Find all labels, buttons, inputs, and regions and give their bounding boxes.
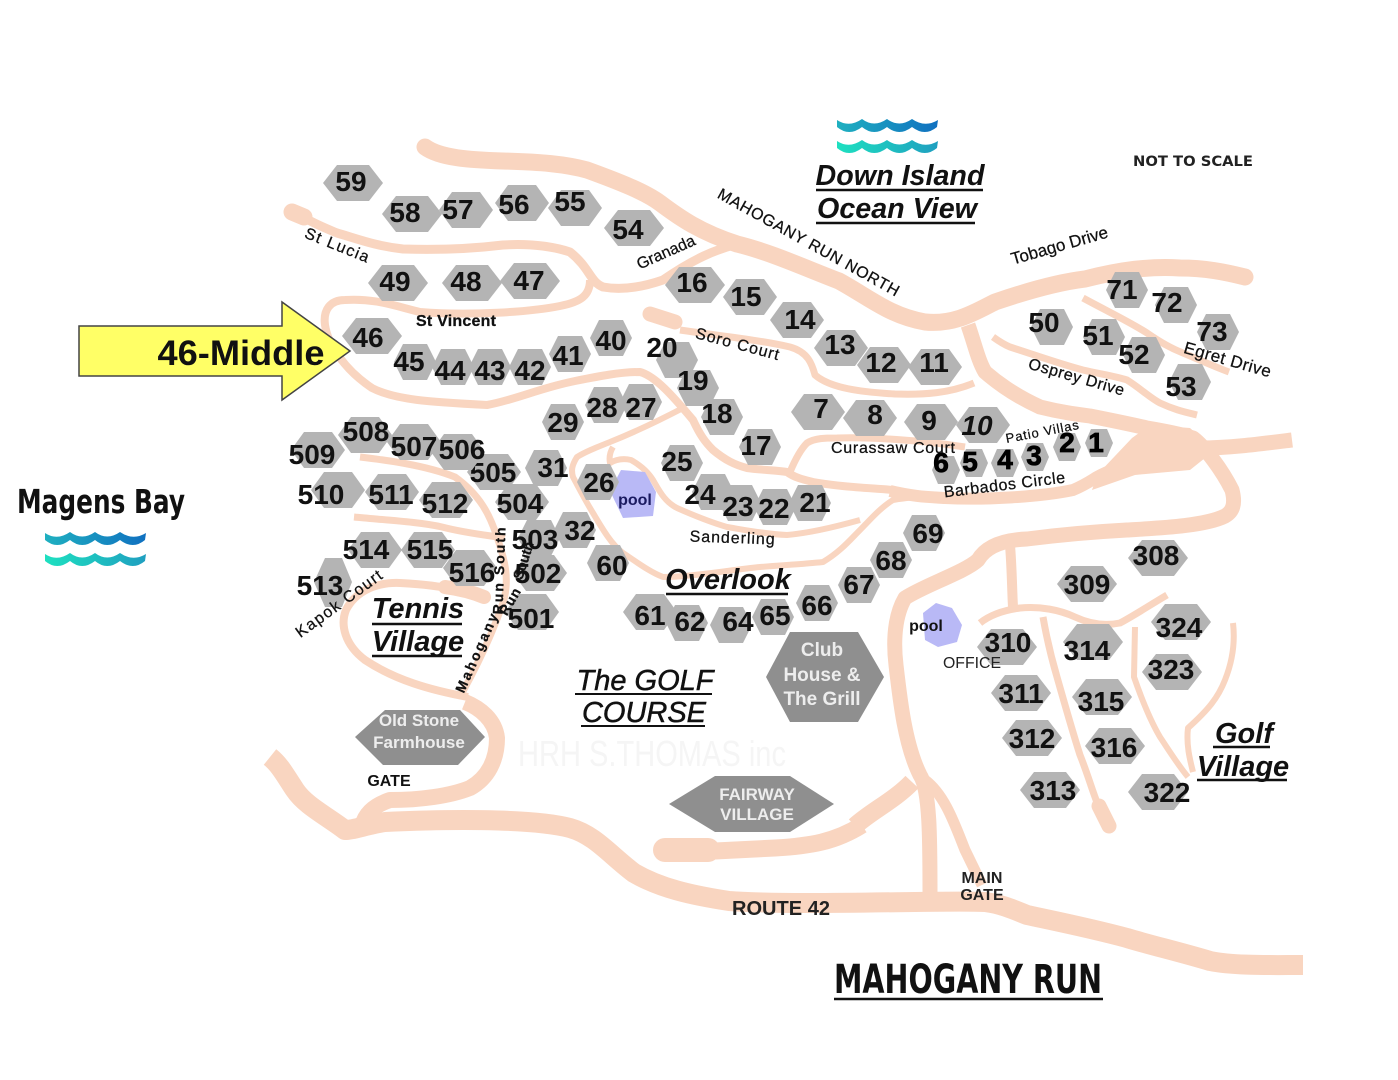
unit 51: 51 — [1082, 320, 1114, 351]
unit 62: 62 — [674, 606, 706, 637]
unit 28 — [585, 387, 627, 423]
unit 31 — [525, 450, 569, 486]
unit 56: 56 — [498, 189, 530, 220]
road labels: Egret Drive — [1182, 338, 1273, 381]
unit 46: 46 — [352, 322, 384, 353]
unit 316 — [1085, 728, 1145, 764]
unit 67 — [838, 567, 880, 603]
pool: lower with office label: OFFICE — [943, 655, 1001, 672]
unit 44 — [432, 349, 474, 386]
unit 29 — [542, 404, 584, 440]
unit 64: 64 — [722, 606, 754, 637]
unit 308 — [1128, 540, 1188, 576]
building: Club House & The Grill: Club — [801, 640, 843, 661]
unit 18 — [701, 398, 743, 435]
unit 501 — [505, 594, 559, 634]
unit 72 — [1151, 287, 1197, 323]
heading: Golf Village: Village — [1197, 751, 1289, 783]
note: not to scale: NOT TO SCALE — [1133, 154, 1253, 170]
unit 310: 310 — [985, 627, 1031, 658]
unit 3 — [1021, 440, 1049, 471]
building: Club House & The Grill — [766, 632, 884, 722]
label: gate: GATE — [367, 773, 411, 790]
heading: Tennis Village: Tennis — [372, 593, 464, 625]
unit 10 — [956, 407, 1010, 443]
arrow: 46-Middle: 46-Middle — [158, 334, 324, 373]
unit 48 — [442, 265, 502, 301]
label: route 42: ROUTE 42 — [732, 898, 830, 920]
unit 20: 20 — [646, 332, 678, 363]
pool: lower with office label: pool — [909, 618, 943, 635]
unit 32 — [554, 512, 596, 548]
road labels — [293, 186, 1273, 695]
unit 15 — [723, 279, 777, 315]
unit 513 — [297, 558, 352, 607]
building: Fairway Village: VILLAGE — [720, 805, 794, 824]
unit 49 — [368, 265, 428, 301]
heading: Magens Bay: Magens Bay — [17, 482, 185, 521]
unit 26: 26 — [583, 467, 615, 498]
unit 53 — [1165, 364, 1211, 402]
unit 50: 50 — [1028, 307, 1060, 338]
road labels: Osprey Drive — [1026, 356, 1126, 400]
unit 62 — [666, 605, 708, 641]
watermark: HRH S.THOMAS inc — [518, 733, 786, 774]
unit 510 — [298, 472, 365, 510]
unit 8: 8 — [867, 399, 883, 430]
unit 49: 49 — [379, 266, 411, 297]
unit 40 — [590, 320, 632, 356]
unit 314 — [1063, 624, 1123, 666]
unit 506: 506 — [439, 434, 485, 465]
unit 2: 2 — [1059, 427, 1075, 458]
unit 41: 41 — [552, 340, 584, 371]
unit 6: 6 — [933, 447, 949, 478]
unit 14: 14 — [784, 304, 816, 335]
unit 4 — [991, 444, 1019, 477]
heading: Mahogany Run: MAHOGANY RUN — [834, 957, 1102, 1003]
unit 11 — [908, 347, 962, 385]
unit 71: 71 — [1106, 274, 1138, 305]
unit 47: 47 — [513, 265, 545, 296]
unit 512: 512 — [422, 488, 468, 519]
unit 66: 66 — [801, 590, 833, 621]
unit 60: 60 — [596, 550, 628, 581]
pool: upper: pool — [618, 492, 652, 509]
unit 40: 40 — [595, 325, 627, 356]
heading: The Golf Course: The GOLF — [576, 665, 716, 697]
unit 27: 27 — [625, 392, 657, 423]
unit 9 — [904, 404, 958, 440]
road labels: Soro Court — [693, 325, 781, 364]
unit 4: 4 — [997, 444, 1013, 475]
unit 16: 16 — [676, 267, 708, 298]
wave icon: Magens Bay — [45, 532, 146, 566]
road labels: MAHOGANY RUN NORTH — [714, 186, 902, 300]
road labels: South — [510, 539, 537, 581]
unit 45: 45 — [393, 346, 425, 377]
unit 14 — [770, 302, 824, 338]
unit 69 — [903, 515, 945, 551]
unit 315 — [1072, 679, 1132, 717]
unit 61: 61 — [634, 600, 666, 631]
unit 1 — [1085, 427, 1113, 458]
heading: Golf Village: Golf — [1215, 718, 1276, 750]
unit 308: 308 — [1133, 540, 1179, 571]
unit 7 — [791, 393, 845, 430]
unit 61 — [623, 594, 677, 631]
unit 312: 312 — [1009, 723, 1055, 754]
unit 58 — [382, 196, 442, 232]
building: Old Stone Farmhouse: Old Stone — [379, 711, 459, 730]
wave icon: Down Island — [837, 119, 938, 153]
unit 27 — [620, 384, 662, 423]
unit 322 — [1128, 774, 1190, 810]
label: main gate: MAIN — [962, 870, 1002, 887]
road labels: Run South — [489, 527, 509, 615]
unit 52: 52 — [1118, 339, 1150, 370]
road labels: Barbados Circle — [943, 470, 1066, 501]
unit 6 — [932, 447, 960, 484]
unit 12 — [857, 347, 911, 383]
building: Old Stone Farmhouse: Farmhouse — [373, 733, 465, 752]
unit 58: 58 — [389, 197, 421, 228]
unit 47 — [500, 263, 560, 299]
unit 501: 501 — [508, 603, 554, 634]
unit 64 — [710, 606, 754, 643]
heading: Down Island Ocean View — [816, 160, 986, 225]
unit 9: 9 — [921, 405, 937, 436]
unit 324 — [1151, 604, 1211, 643]
heading: Overlook: Overlook — [665, 564, 793, 596]
label: main gate: GATE — [960, 887, 1004, 904]
unit 54 — [604, 210, 664, 246]
unit 65 — [752, 599, 794, 635]
road labels: Patio Villas — [1004, 417, 1080, 446]
unit 22: 22 — [758, 493, 790, 524]
unit 21 — [789, 485, 831, 521]
unit 32: 32 — [564, 515, 596, 546]
unit 42: 42 — [514, 355, 546, 386]
unit 42 — [509, 349, 551, 386]
pool: upper — [610, 470, 656, 518]
unit 72: 72 — [1151, 287, 1183, 318]
unit 54: 54 — [612, 214, 644, 245]
unit 313 — [1020, 772, 1080, 808]
building: Fairway Village — [669, 776, 834, 832]
building: Club House & The Grill: House & — [783, 665, 861, 686]
unit 28: 28 — [586, 392, 618, 423]
unit 16 — [665, 267, 725, 303]
unit 313: 313 — [1030, 775, 1076, 806]
unit 60 — [587, 545, 629, 581]
unit 310 — [977, 627, 1037, 665]
unit 57: 57 — [442, 194, 474, 225]
unit 26 — [577, 464, 619, 500]
unit 509: 509 — [289, 439, 335, 470]
unit 19: 19 — [677, 365, 709, 396]
unit 31: 31 — [537, 452, 569, 483]
road labels: Kapok Court — [293, 567, 386, 642]
road labels: Granada — [634, 232, 698, 273]
road labels: Sanderling — [689, 529, 775, 548]
unit 311: 311 — [998, 678, 1044, 709]
unit 21: 21 — [799, 487, 831, 518]
unit 41 — [549, 336, 591, 372]
unit 5: 5 — [962, 446, 978, 477]
unit 23 — [719, 485, 761, 522]
unit 8 — [843, 399, 897, 436]
unit 43: 43 — [474, 355, 506, 386]
unit 23: 23 — [722, 491, 754, 522]
pool: lower with office label — [909, 603, 1001, 672]
unit 22 — [754, 489, 796, 525]
road junction — [1092, 425, 1215, 490]
road labels: Curassaw Court — [831, 440, 956, 457]
unit 13: 13 — [824, 329, 856, 360]
unit 56 — [495, 185, 549, 221]
unit 11: 11 — [919, 347, 949, 378]
unit 43 — [469, 349, 511, 386]
unit 3: 3 — [1026, 440, 1042, 471]
heading: Down Island Ocean View: Ocean View — [817, 193, 979, 225]
unit 323: 323 — [1148, 654, 1194, 685]
building: Club House & The Grill: The Grill — [783, 689, 861, 710]
unit 315: 315 — [1078, 686, 1124, 717]
unit 514 — [343, 532, 402, 568]
unit 71 — [1106, 272, 1148, 308]
unit 508: 508 — [343, 416, 389, 447]
unit 1: 1 — [1088, 427, 1104, 458]
road labels: St Lucia — [302, 225, 371, 266]
unit 73: 73 — [1196, 316, 1228, 347]
unit 502: 502 — [515, 558, 561, 589]
unit 25 — [661, 445, 703, 481]
unit 55 — [548, 186, 602, 226]
unit 514: 514 — [343, 534, 390, 565]
building: Fairway Village: FAIRWAY — [719, 785, 795, 804]
road labels: Tobago Drive — [1009, 223, 1110, 269]
unit 53: 53 — [1165, 371, 1197, 402]
unit 46 — [342, 318, 402, 354]
unit 312 — [1002, 720, 1062, 756]
unit 511: 511 — [368, 479, 414, 510]
heading: Tennis Village: Village — [372, 626, 464, 658]
unit 48: 48 — [450, 266, 482, 297]
arrow: 46-Middle — [79, 302, 350, 400]
unit 52 — [1118, 337, 1165, 373]
unit 24 — [684, 474, 734, 510]
unit 51 — [1082, 319, 1125, 355]
heading: Golf Village — [1197, 718, 1289, 783]
unit 59: 59 — [335, 166, 367, 197]
unit 510: 510 — [298, 479, 344, 510]
unit 10: 10 — [961, 410, 993, 441]
unit 516: 516 — [449, 557, 495, 588]
unit 59 — [323, 165, 383, 201]
road labels: St Vincent — [416, 313, 497, 330]
heading: The Golf Course — [575, 665, 716, 729]
unit 503: 503 — [512, 524, 558, 555]
unit 67: 67 — [843, 569, 875, 600]
heading: Tennis Village — [372, 593, 464, 658]
unit 44: 44 — [434, 355, 466, 386]
unit 68 — [870, 542, 912, 578]
unit 50 — [1028, 307, 1073, 345]
unit 17: 17 — [740, 430, 772, 461]
unit 66 — [796, 585, 838, 621]
label: main gate — [960, 870, 1004, 904]
unit 309 — [1057, 566, 1117, 602]
road labels: Mahogany — [452, 611, 501, 695]
unit 57 — [439, 192, 493, 228]
unit 505: 505 — [470, 457, 516, 488]
unit 504: 504 — [497, 488, 544, 519]
unit 7: 7 — [813, 393, 829, 424]
unit 29: 29 — [547, 407, 579, 438]
unit 17 — [739, 429, 781, 465]
unit 13 — [814, 329, 868, 366]
unit 12: 12 — [865, 347, 897, 378]
unit 311 — [991, 675, 1051, 711]
unit 316: 316 — [1091, 732, 1137, 763]
heading: The Golf Course: COURSE — [582, 697, 707, 729]
unit 515: 515 — [407, 534, 453, 565]
unit 2 — [1053, 427, 1081, 461]
unit 509 — [289, 432, 345, 470]
building: Old Stone Farmhouse — [355, 710, 485, 765]
unit 68: 68 — [875, 545, 907, 576]
unit 25: 25 — [661, 446, 693, 477]
heading: Down Island Ocean View: Down Island — [816, 160, 986, 192]
unit 24: 24 — [684, 479, 716, 510]
unit 69: 69 — [912, 518, 944, 549]
unit 507: 507 — [391, 431, 437, 462]
unit 5 — [960, 446, 988, 477]
unit 65: 65 — [759, 600, 791, 631]
unit 309: 309 — [1064, 569, 1110, 600]
road network — [270, 147, 1303, 965]
unit 513: 513 — [297, 570, 343, 601]
unit 324: 324 — [1156, 612, 1203, 643]
unit 19 — [677, 365, 719, 406]
unit 322: 322 — [1144, 777, 1190, 808]
unit 45 — [393, 344, 436, 380]
unit 15: 15 — [730, 281, 762, 312]
unit 18: 18 — [701, 398, 733, 429]
unit 20 — [646, 332, 698, 378]
unit 314: 314 — [1064, 635, 1111, 666]
unit 73 — [1196, 314, 1239, 350]
unit 55: 55 — [554, 186, 586, 217]
road labels: Run — [495, 585, 524, 618]
unit 323 — [1142, 654, 1202, 690]
